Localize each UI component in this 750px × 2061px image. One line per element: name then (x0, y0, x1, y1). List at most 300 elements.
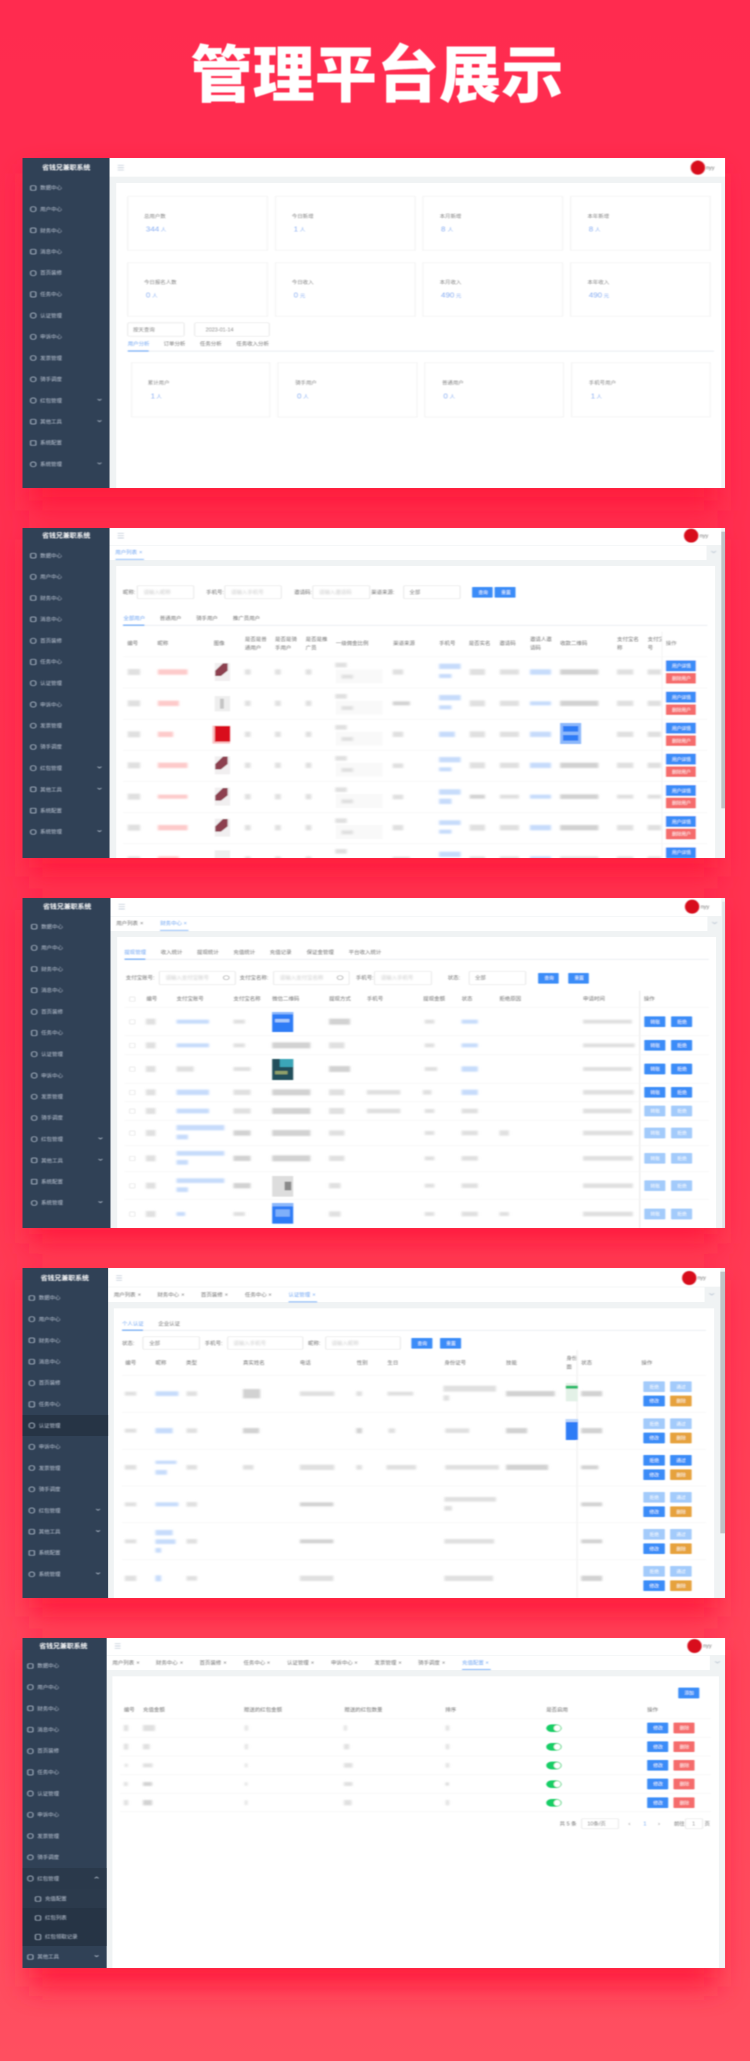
open tabs: 首页装修 (201, 1291, 223, 1298)
row 6: 拒绝 (677, 1130, 687, 1136)
user table header: 通用户 (245, 644, 261, 652)
config table header: 是否启用 (546, 1706, 568, 1714)
row 3: 修改 (650, 1472, 659, 1478)
search form: 全部 (149, 1339, 160, 1347)
analysis tabs: 用户分析 (128, 340, 149, 348)
finance tabs: 提现管理 (124, 948, 147, 956)
user analysis cards: 手机号用户 (589, 379, 616, 386)
row 4 (125, 1492, 692, 1517)
row 5: 转账 (651, 1108, 660, 1115)
search form: 手机号: (206, 588, 224, 596)
sidebar menu: 申诉中心 (39, 1443, 61, 1451)
sidebar menu: 其他工具 (40, 786, 63, 793)
sidebar menu (31, 184, 101, 468)
row 4: 删除用户 (672, 769, 691, 775)
row 9: 拒绝 (677, 1211, 687, 1217)
withdrawal table rows (124, 1007, 709, 1224)
user table header: 号 (648, 645, 653, 652)
sidebar menu: 认证管理 (41, 1050, 64, 1058)
panel: finance center screenshot (22, 898, 725, 1228)
open tabs: 用户列表 (115, 548, 138, 556)
sidebar menu: 数据中心 (37, 1662, 60, 1670)
search form (126, 971, 589, 985)
date filters: 2023-01-14 (206, 328, 234, 333)
user table header: 是否是普 (245, 635, 267, 643)
stat cards row 1: 本月新增 (440, 212, 461, 220)
stat cards row 2: 本月收入 (440, 278, 462, 286)
row 8: 拒绝 (677, 1183, 687, 1188)
withdrawal table header: 编号 (146, 995, 157, 1003)
finance tabs (124, 948, 709, 960)
user analysis cards: 人 (303, 394, 310, 400)
pagination: ‹ (629, 1822, 631, 1827)
stat cards row 1: 人 (300, 227, 306, 234)
search form: 支付宝账号: (126, 974, 155, 982)
row 3 (130, 1059, 692, 1080)
open tabs: 财务中心 (157, 1291, 180, 1298)
search form (122, 1337, 461, 1349)
finance tabs: 平台收入统计 (349, 948, 381, 956)
sidebar menu: 其他工具 (40, 418, 63, 426)
top header: nyy (697, 1276, 706, 1282)
row 5 (125, 1529, 692, 1554)
row 3: 删除 (676, 1472, 686, 1478)
search form: 请输入手机号 (231, 588, 264, 596)
verification table header: 性别 (357, 1359, 368, 1366)
stat cards row 2: 元 (604, 293, 609, 300)
row 4: 用户详情 (672, 756, 691, 763)
row 4: 删除 (680, 1781, 690, 1788)
sidebar menu: 认证管理 (39, 1422, 61, 1429)
row 4: 修改 (653, 1781, 663, 1788)
open tabs: × (485, 1661, 489, 1666)
user table header: 是否是骑 (275, 635, 298, 643)
panel: verification management screenshot (22, 1268, 725, 1598)
row 5 (124, 1797, 695, 1808)
open tabs: × (136, 1661, 140, 1666)
finance tabs: 收入统计 (161, 948, 182, 956)
row 3: 删除用户 (672, 738, 691, 744)
sidebar menu: 消息中心 (41, 986, 64, 994)
row 4: 拒绝 (650, 1494, 659, 1500)
stat cards row 1 (144, 213, 610, 232)
date filters (128, 323, 269, 336)
user tabs: 普通用户 (160, 614, 182, 622)
user table header: 图像 (214, 639, 226, 647)
sidebar menu: 任务中心 (39, 1400, 61, 1408)
stat cards row 1: 总用户数 (144, 212, 167, 220)
open tabs: 任务中心 (245, 1291, 267, 1298)
row 4: 删除 (676, 1509, 686, 1515)
sidebar submenu: 红包领取记录 (45, 1933, 78, 1941)
user table header: 昵称 (157, 639, 168, 647)
row 3: 转账 (651, 1066, 660, 1073)
analysis tabs: 订单分析 (164, 340, 185, 348)
sidebar menu: 财务中心 (40, 227, 63, 234)
user analysis cards: 0 (297, 392, 301, 400)
sidebar menu: 申诉中心 (37, 1811, 60, 1819)
panel: data dashboard screenshot (22, 158, 725, 488)
sidebar menu: 骑手调度 (40, 375, 63, 383)
user analysis cards: 累计用户 (148, 379, 170, 386)
search form: 请输入昵称 (331, 1339, 359, 1347)
withdrawal table header: 微信二维码 (272, 995, 299, 1003)
stat cards row 1: 344 (146, 225, 160, 234)
sidebar title: 省钱兄兼职系统 (43, 902, 92, 911)
row 1: 删除 (680, 1725, 690, 1732)
user table header: 收款二维码 (560, 639, 587, 647)
pagination: 页 (705, 1821, 710, 1827)
withdrawal table header: 状态 (462, 995, 472, 1003)
search form: 请输入支付宝名称 (280, 974, 323, 982)
sidebar menu: 系统管理 (40, 828, 63, 836)
stat cards row 2: 今日报名人数 (144, 278, 177, 286)
open tabs: 发票管理 (375, 1659, 397, 1666)
sidebar (22, 1268, 108, 1598)
user analysis cards: 人 (596, 394, 603, 400)
sidebar menu: 发票管理 (41, 1093, 64, 1101)
open tabs: 充值配置 (462, 1659, 484, 1666)
sidebar menu: 红包管理 (40, 397, 63, 404)
row 5: 拒绝 (650, 1531, 659, 1537)
search form: 手机号: (356, 974, 374, 982)
row 6 (125, 1566, 692, 1591)
user table header: 手用户 (275, 644, 291, 652)
open tabs: × (312, 1293, 316, 1298)
sidebar menu: 其他工具 (41, 1157, 64, 1164)
row 3: 拒绝 (650, 1457, 659, 1463)
row 2 (125, 1418, 692, 1443)
row 4: 拒绝 (677, 1089, 687, 1095)
open tabs: × (180, 1661, 183, 1666)
stat cards row 1: 8 (589, 225, 593, 234)
row 2: 拒绝 (650, 1421, 659, 1426)
sidebar menu: 发票管理 (40, 722, 63, 730)
verification table header: 操作 (641, 1359, 653, 1366)
withdrawal table header: 支付宝账号 (176, 995, 204, 1003)
top header (118, 529, 709, 543)
sidebar title: 省钱兄兼职系统 (39, 1641, 88, 1650)
stat cards row 2: 元 (456, 293, 461, 300)
user tabs (123, 614, 707, 626)
search form: 昵称: (123, 588, 135, 596)
row 7 (130, 1151, 692, 1165)
row 1: 拒绝 (650, 1384, 659, 1389)
row 7: 用户详情 (672, 849, 691, 856)
pagination: 共 5 条 (560, 1820, 577, 1827)
sidebar menu: 红包管理 (39, 1507, 61, 1514)
withdrawal table header: 拒绝原因 (499, 995, 521, 1003)
withdrawal table header: 提现方式 (329, 995, 352, 1003)
open tabs: 用户列表 (114, 1291, 136, 1298)
stat cards row 1: 人 (161, 227, 167, 234)
add button: 添加 (684, 1690, 694, 1697)
sidebar menu: 首页装修 (40, 637, 63, 644)
open tabs: × (442, 1661, 445, 1666)
row 7: 转账 (651, 1155, 660, 1162)
user tabs: 骑手用户 (196, 614, 218, 622)
open tabs: 认证管理 (288, 1291, 311, 1298)
sidebar (22, 1638, 107, 1968)
stat cards row 1: 人 (595, 227, 601, 234)
stat cards row 2: 今日收入 (292, 278, 314, 286)
top header (115, 1639, 712, 1653)
finance tabs: 保证金管理 (307, 948, 335, 956)
search form: 请输入昵称 (143, 588, 171, 596)
open tabs (112, 1659, 720, 1670)
row 3 (125, 1455, 692, 1480)
open tabs: 用户列表 (112, 1659, 135, 1666)
sidebar menu: 消息中心 (40, 248, 63, 255)
verification table header (125, 1350, 653, 1598)
search form: 邀请码: (294, 588, 312, 596)
row 1: 修改 (650, 1398, 659, 1405)
stat cards row 2: 元 (300, 293, 305, 300)
stat cards row 2: 0 (146, 291, 150, 300)
pagination: 1 (643, 1822, 646, 1827)
user table header: 一级佣金比例 (336, 639, 368, 647)
search form: 状态: (122, 1339, 134, 1347)
row 2 (130, 1040, 692, 1051)
row 5: 删除用户 (672, 800, 691, 807)
search form: 全部 (475, 974, 486, 982)
verification tabs (122, 1320, 706, 1331)
search form (123, 586, 516, 599)
open tabs: 认证管理 (287, 1659, 310, 1666)
active menu item band (22, 1415, 108, 1436)
top header: nyy (703, 1644, 712, 1650)
withdrawal table header: 提现金额 (423, 995, 446, 1003)
finance tabs: 充值记录 (270, 948, 292, 956)
sidebar menu: 系统管理 (39, 1570, 61, 1578)
row 1 (125, 1381, 692, 1406)
analysis tabs: 任务收入分析 (236, 340, 269, 348)
sidebar menu: 系统管理 (40, 460, 63, 468)
sidebar menu: 认证管理 (40, 679, 63, 687)
sidebar menu: 用户中心 (41, 944, 64, 952)
top header: nyy (706, 166, 715, 171)
search form: 请输入手机号 (233, 1339, 266, 1347)
finance tabs: 充值统计 (233, 948, 255, 956)
row 3: 拒绝 (677, 1066, 687, 1072)
sidebar submenu: 其他工具 (37, 1953, 60, 1961)
user analysis cards: 普通用户 (442, 379, 464, 386)
row 5: 拒绝 (677, 1108, 687, 1114)
row 6: 删除 (676, 1583, 686, 1589)
search form: 全部 (409, 588, 420, 596)
user analysis cards: 人 (450, 394, 456, 400)
sidebar menu: 消息中心 (40, 615, 63, 623)
row 4: 转账 (651, 1089, 660, 1096)
analysis tabs: 任务分析 (200, 340, 222, 348)
stat cards row 1: 8 (441, 225, 445, 234)
row 2: 转账 (651, 1042, 660, 1049)
row 2: 拒绝 (677, 1042, 687, 1048)
verification table header: 编号 (125, 1359, 136, 1366)
row 9 (130, 1203, 692, 1224)
user table header: 邀请码 (499, 639, 516, 647)
row 9: 转账 (651, 1211, 660, 1218)
sidebar menu: 骑手调度 (40, 743, 63, 751)
sidebar title: 省钱兄兼职系统 (41, 1273, 89, 1282)
sidebar menu: 发票管理 (37, 1832, 60, 1840)
sidebar menu (31, 552, 101, 836)
sidebar menu (28, 1662, 99, 1882)
verification table header: 真实姓名 (243, 1359, 265, 1366)
user analysis cards: 1 (151, 392, 155, 400)
search form: 查询 (418, 1340, 427, 1347)
sidebar menu: 用户中心 (37, 1683, 60, 1691)
sidebar menu: 数据中心 (41, 923, 64, 930)
sidebar menu: 发票管理 (39, 1464, 61, 1472)
sidebar menu: 红包管理 (37, 1875, 60, 1882)
stat cards row 1: 人 (448, 227, 454, 234)
sidebar title: 省钱兄兼职系统 (42, 531, 91, 540)
date filters: 按天查询 (133, 326, 155, 333)
sidebar menu (32, 923, 102, 1207)
sidebar title: 省钱兄兼职系统 (42, 163, 91, 172)
row 5: 用户详情 (672, 788, 691, 794)
user table header: 是否实名 (469, 639, 491, 647)
row 1 (128, 660, 696, 684)
panel: user list screenshot (22, 528, 725, 866)
row 1: 用户详情 (672, 663, 691, 670)
user table header: 操作 (666, 639, 678, 647)
row 2: 修改 (653, 1744, 663, 1750)
user table header: 是否是推 (306, 635, 327, 643)
open tabs: 财务中心 (156, 1659, 179, 1666)
row 1: 拒绝 (677, 1019, 687, 1024)
sidebar menu: 数据中心 (39, 1294, 61, 1302)
sidebar menu: 数据中心 (40, 552, 63, 559)
verification table header: 技能 (506, 1359, 518, 1366)
row 5: 修改 (653, 1800, 663, 1806)
search form: 昵称: (308, 1339, 320, 1347)
row 2 (124, 1741, 695, 1752)
verification table header: 身份 (566, 1354, 578, 1362)
open tabs (116, 919, 717, 931)
user table header: 支付宝名 (617, 635, 639, 643)
user table header: 手机号 (439, 639, 455, 647)
sidebar menu: 财务中心 (41, 965, 64, 973)
row 4: 修改 (650, 1509, 659, 1515)
verification tabs: 企业认证 (158, 1320, 181, 1327)
config table header: 排序 (445, 1706, 456, 1714)
row 6: 拒绝 (650, 1568, 659, 1574)
sidebar submenu (28, 1895, 99, 1961)
row 3 (125, 1760, 695, 1771)
open tabs: 用户列表 (116, 919, 139, 927)
row 1 (124, 1723, 695, 1733)
stat cards row 2 (144, 279, 610, 298)
row 6: 修改 (650, 1583, 659, 1589)
row 1: 转账 (651, 1019, 660, 1025)
user analysis cards (148, 380, 616, 399)
sidebar menu: 任务中心 (37, 1768, 60, 1776)
search form: 查询 (478, 589, 488, 596)
sidebar menu: 认证管理 (37, 1790, 60, 1797)
stat cards row 2: 本年收入 (587, 278, 610, 286)
search form: 重置 (501, 589, 511, 596)
row 6: 通过 (676, 1568, 686, 1575)
row 5: 修改 (650, 1546, 659, 1552)
sidebar menu: 系统配置 (40, 807, 62, 814)
verification tabs: 个人认证 (122, 1320, 145, 1327)
user analysis cards: 人 (156, 394, 163, 400)
row 1: 删除 (676, 1398, 686, 1405)
withdrawal table header: 操作 (644, 995, 656, 1003)
withdrawal table header: 手机号 (367, 995, 383, 1003)
user table rows (123, 656, 707, 866)
sidebar menu: 财务中心 (37, 1705, 60, 1712)
pagination: › (658, 1822, 660, 1827)
sidebar (22, 158, 110, 488)
row 1: 删除用户 (672, 675, 691, 682)
search form: 渠道来源: (371, 588, 394, 596)
user tabs: 全部用户 (123, 614, 145, 622)
top header: nyy (700, 534, 709, 539)
title: 管理平台展示 (190, 42, 563, 110)
open tabs: × (268, 1293, 272, 1298)
open tabs: × (138, 1293, 141, 1298)
sidebar menu: 用户中心 (40, 205, 63, 213)
sidebar menu: 首页装修 (40, 269, 63, 277)
row 5 (128, 785, 696, 808)
open tabs: × (140, 921, 143, 927)
row 3: 删除 (680, 1762, 690, 1769)
verification table header: 面 (566, 1364, 572, 1370)
sidebar menu (29, 1294, 100, 1578)
top header (118, 161, 715, 175)
sidebar menu: 红包管理 (41, 1135, 64, 1143)
top header (119, 900, 710, 914)
sidebar menu: 任务中心 (40, 658, 63, 666)
open tabs: × (223, 1661, 227, 1666)
withdrawal table header (130, 991, 656, 1228)
search form: 重置 (574, 975, 584, 982)
sidebar menu: 首页装修 (39, 1379, 61, 1387)
verification table header: 生日 (387, 1359, 398, 1366)
withdrawal table header: 支付宝名称 (233, 995, 261, 1003)
add button (678, 1688, 699, 1698)
config table header: 赠送的红包金额 (244, 1706, 283, 1714)
config table header: 赠送的红包数量 (344, 1706, 382, 1714)
row 3: 修改 (653, 1762, 663, 1769)
config table header: 充值金额 (143, 1706, 166, 1714)
open tabs (114, 1291, 714, 1302)
sidebar menu: 骑手调度 (39, 1485, 61, 1493)
stat cards row 2: 0 (294, 291, 298, 300)
open tabs: 骑手调度 (418, 1659, 441, 1666)
pagination: 10条/页 (587, 1820, 606, 1827)
sidebar menu: 用户中心 (40, 573, 63, 581)
row 2: 删除 (676, 1435, 686, 1442)
row 6: 转账 (651, 1130, 660, 1137)
search form: 状态: (448, 974, 460, 982)
user table header (127, 632, 708, 858)
stat cards row 1: 本年新增 (587, 212, 609, 220)
user table header: 邀请人邀 (530, 635, 553, 643)
search form: 支付宝名称: (240, 974, 268, 982)
verification table header: 身份证号 (444, 1359, 466, 1366)
sidebar menu: 系统配置 (39, 1549, 61, 1557)
search form: 手机号: (205, 1339, 223, 1347)
open tabs: 财务中心 (160, 919, 183, 927)
sidebar menu: 申诉中心 (41, 1072, 64, 1079)
sidebar menu: 首页装修 (37, 1747, 60, 1755)
user table header: 请码 (530, 644, 541, 652)
user analysis cards: 0 (443, 392, 448, 400)
